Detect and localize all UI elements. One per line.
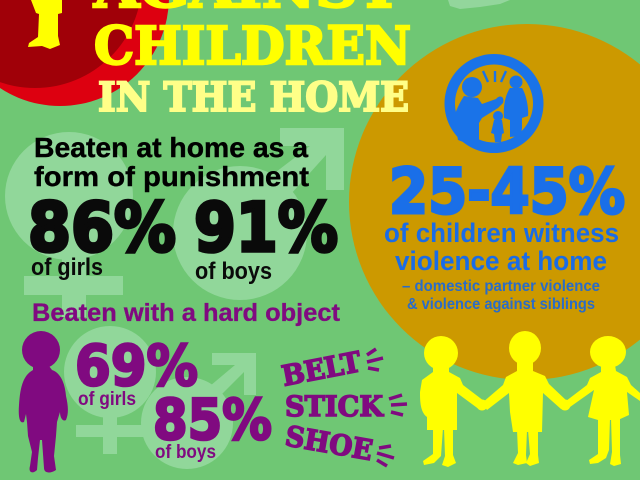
adult aggressor <box>454 77 503 148</box>
objects list: belt stick shoe: BELT <box>279 345 364 393</box>
stat: 91% of boys: of boys <box>195 258 272 285</box>
children holding hands <box>420 331 640 467</box>
stat: 85% of boys: of boys <box>155 442 216 463</box>
title: IN THE HOME <box>98 74 409 121</box>
red circle with child <box>0 0 169 106</box>
title: CHILDREN <box>94 16 411 77</box>
impact rays <box>483 71 506 82</box>
text: children witness violence <box>384 218 619 276</box>
male symbol large <box>173 128 344 300</box>
text: children witness violence: of children witness <box>384 218 619 248</box>
middle boy <box>482 331 570 466</box>
left girl <box>420 336 488 467</box>
female symbol large <box>5 132 133 317</box>
icon: child silhouette top <box>28 0 62 49</box>
text: violence types: & violence against siblings <box>407 296 595 313</box>
stat: 91% of boys: 91% <box>194 189 338 268</box>
stat: 69% of girls: of girls <box>78 389 136 410</box>
right girl <box>566 336 640 466</box>
child <box>491 111 504 142</box>
impact rays <box>367 349 407 466</box>
heading: beaten at home <box>34 132 309 192</box>
map fragment <box>448 0 510 9</box>
title <box>93 0 411 121</box>
text: children witness violence: violence at home <box>395 246 607 276</box>
stat: 69% of girls: 69% <box>75 334 198 399</box>
icon: family violence <box>445 54 544 153</box>
objects list: belt stick shoe <box>279 345 407 467</box>
stat: 86% of girls: of girls <box>31 254 103 281</box>
icon: purple child <box>19 331 68 472</box>
male symbol small <box>141 353 256 469</box>
heading: beaten at home: Beaten at home as a <box>34 132 308 163</box>
heading: beaten with a hard object: Beaten with a hard object <box>32 299 341 327</box>
heading: beaten at home: form of punishment <box>34 161 309 192</box>
female symbol small <box>64 326 156 454</box>
stat: 85% of boys: 85% <box>153 388 272 453</box>
objects list: belt stick shoe: STICK <box>285 390 385 423</box>
text: violence types <box>402 278 600 313</box>
gold circle <box>349 24 640 380</box>
stat: 86% of girls: 86% <box>28 189 176 268</box>
objects list: belt stick shoe: SHOE <box>283 419 375 467</box>
adult victim <box>504 76 528 137</box>
text: violence types: – domestic partner violence <box>402 278 600 295</box>
